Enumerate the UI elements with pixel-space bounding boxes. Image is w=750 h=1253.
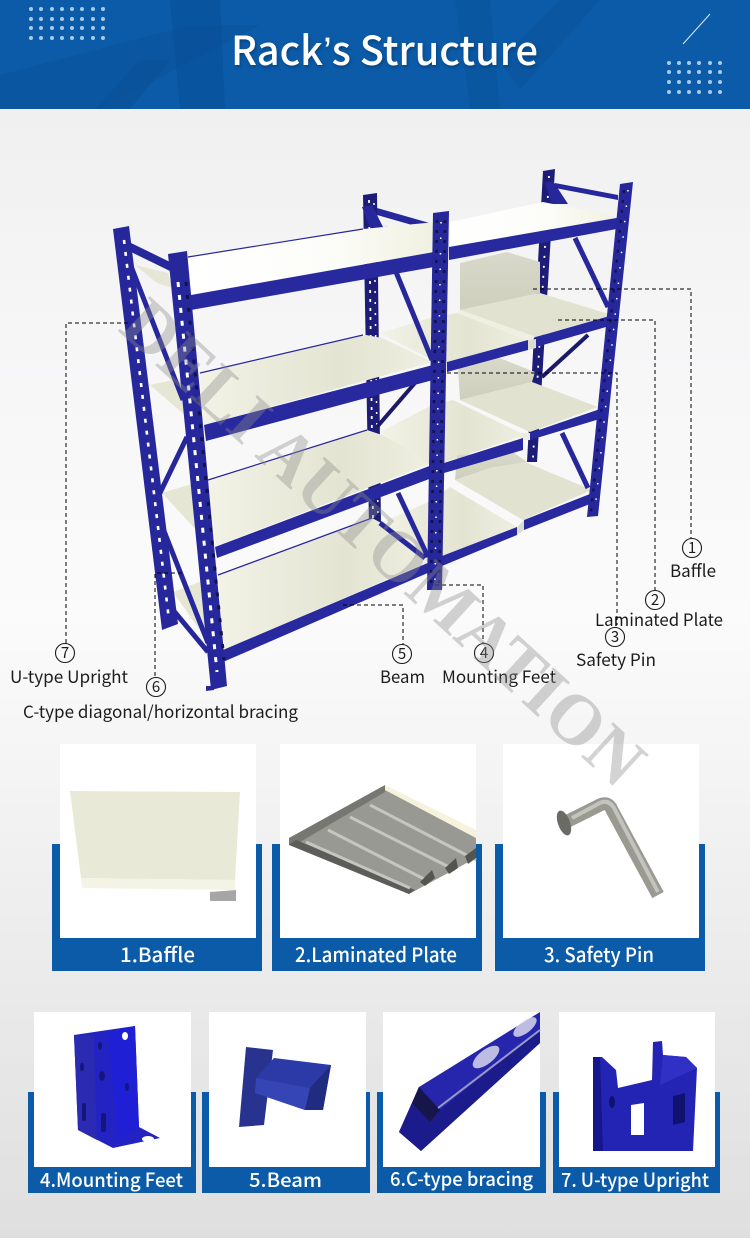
callout 6 [23, 573, 298, 723]
callout 7 [10, 323, 129, 688]
card: beam: 5.Beam [249, 1164, 322, 1193]
card: u-type upright: 7. U-type Upright [561, 1164, 709, 1193]
card: safety pin [495, 744, 705, 971]
top end ties [131, 183, 618, 271]
card: c-type bracing: 6.C-type bracing [390, 1163, 533, 1192]
card: baffle: 1.Baffle [120, 939, 195, 968]
shelves left bay [188, 222, 436, 650]
watermark: DELI AUTOMATION [106, 283, 661, 802]
callout 4 [435, 585, 557, 688]
card: laminated plate: 2.Laminated Plate [295, 939, 457, 968]
slash accent [683, 14, 710, 44]
beams [191, 217, 622, 662]
icon: u-type upright [593, 1041, 697, 1151]
card: mounting feet: 4.Mounting Feet [40, 1164, 183, 1193]
icon: mounting feet [74, 1026, 160, 1148]
callout 1 [533, 289, 716, 582]
icon: c-type bracing [399, 1012, 540, 1151]
callout 3: Safety Pin [576, 646, 656, 671]
dots top left [29, 7, 105, 40]
card: safety pin: 3. Safety Pin [544, 939, 654, 968]
icon: beam [239, 1047, 331, 1127]
callouts [10, 289, 723, 723]
icon: laminated plate [289, 785, 476, 894]
dots bottom right [667, 61, 722, 94]
shelves middle and baffles right bay [380, 202, 618, 562]
card: laminated plate [272, 744, 482, 971]
card: beam [202, 1012, 370, 1193]
bracing [122, 238, 608, 652]
callout 1: Baffle [670, 557, 716, 582]
title: Rack’s Structure [231, 19, 538, 77]
card: u-type upright [553, 1012, 720, 1193]
rack illustration [113, 169, 633, 691]
card: mounting feet [28, 1012, 196, 1193]
callout 4: Mounting Feet [442, 663, 557, 688]
callout 6: 6 [152, 676, 160, 697]
end wings [135, 225, 433, 642]
callout 3: 3 [611, 626, 619, 647]
card: c-type bracing [377, 1012, 546, 1193]
callout 5: Beam [380, 663, 425, 688]
callout 2: 2 [651, 589, 659, 610]
callout 3 [447, 373, 656, 671]
callout 6: C-type diagonal/horizontal bracing [23, 698, 298, 723]
icon: baffle [70, 791, 240, 901]
front uprights [113, 182, 633, 691]
header banner [0, 0, 750, 109]
callout 7: U-type Upright [10, 663, 129, 688]
callout 7: 7 [61, 642, 69, 663]
callout 5: 5 [398, 643, 406, 664]
callout 5 [343, 605, 425, 688]
back uprights [362, 169, 568, 525]
card: baffle [52, 744, 262, 971]
callout 1: 1 [688, 537, 696, 558]
callout 2 [558, 320, 723, 631]
callout 4: 4 [480, 642, 488, 663]
callout 2: Laminated Plate [595, 606, 723, 631]
icon: safety pin [554, 802, 658, 895]
